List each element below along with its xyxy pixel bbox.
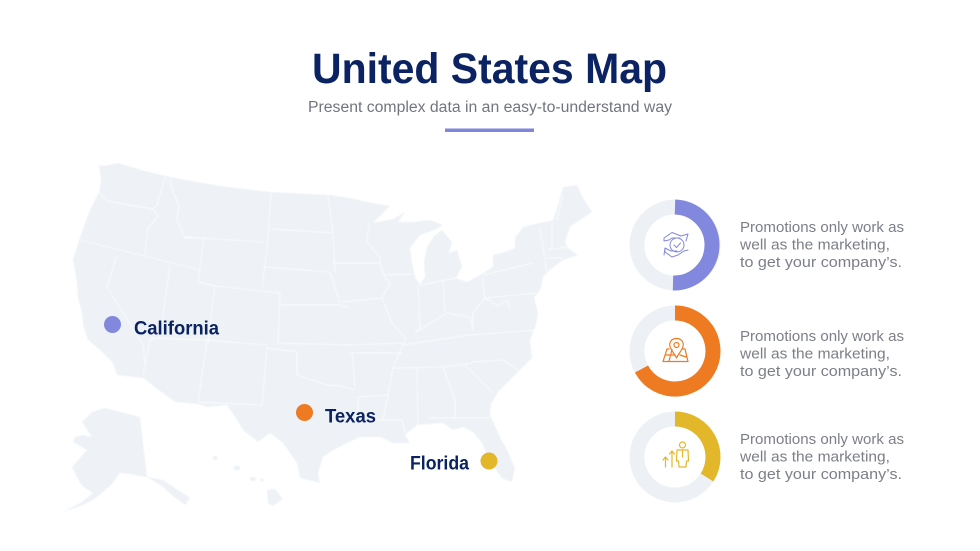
label: Florida [410,452,498,474]
label: California [104,316,219,340]
donut chart: 67% orange [637,313,713,389]
icon: hands with check [664,232,688,257]
panel: item 1 [637,207,904,283]
marker: California [104,316,121,333]
donut chart: 51% purple [637,207,713,283]
description: to get your company’s. [740,255,902,271]
Hawaii [212,456,283,506]
donut chart: 34% yellow [637,419,713,495]
icon: person with growth arrows [663,442,688,467]
Alaska [63,408,190,512]
title: United States Map [312,45,667,93]
description [739,220,904,271]
icon: map with pin [663,338,688,362]
description: Promotions only work as [740,329,904,345]
title underline [445,128,534,132]
map: United States [63,163,592,512]
panel: item 2 [637,313,904,389]
name: Texas: Texas [325,406,376,428]
name: Florida: Florida [410,454,469,474]
mainland land mass [73,163,592,483]
description: well as the marketing, [739,346,890,362]
description: to get your company’s. [740,467,902,483]
label: Texas [296,404,376,428]
panel: item 3 [637,419,904,495]
marker: Florida [480,452,498,470]
state borders [80,177,567,433]
description: Promotions only work as [740,220,904,236]
subtitle: Present complex data in an easy-to-understand way [308,99,672,116]
description: Promotions only work as [740,432,904,448]
marker: Texas [296,404,313,421]
description [739,329,904,380]
name: California: California [134,318,219,340]
description: well as the marketing, [739,238,890,254]
description: well as the marketing, [739,450,890,466]
description: to get your company’s. [740,364,902,380]
description [739,432,904,483]
